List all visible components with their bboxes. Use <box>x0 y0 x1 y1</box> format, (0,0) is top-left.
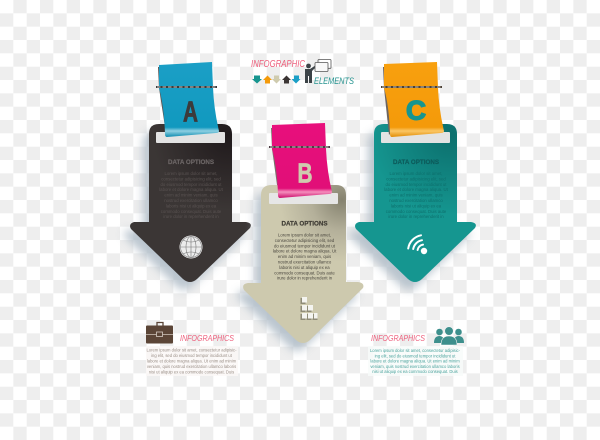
title: infographic: INFOGRAPHIC <box>251 58 305 70</box>
heading right: INFOGRAPHICS <box>371 333 425 343</box>
ribbon B <box>272 123 332 198</box>
bottom left block <box>146 322 238 376</box>
letter C: C <box>406 96 426 126</box>
body text left: nisi ut aliquip ex ea commodo consequat. Duis <box>149 370 234 374</box>
arrow B body <box>243 185 363 343</box>
ribbon C <box>384 62 444 137</box>
icon: globe <box>180 236 202 258</box>
body text B: commodo consequat. Duis aute <box>274 270 335 275</box>
body text C: enim ad minim veniam, quis <box>389 193 443 198</box>
top title block <box>251 58 355 87</box>
stitching B <box>269 146 330 148</box>
arrow C group <box>349 62 476 290</box>
arrow A slot <box>156 132 225 143</box>
body text B: nostrud exercitation ullamco <box>278 260 332 264</box>
arrow C slot <box>381 132 450 143</box>
body text B: consectetur adipisicing elit, sed <box>275 238 335 243</box>
arrow B shadow <box>237 193 357 351</box>
body text right: nisi ut aliquip ex ea commodo consequat. Duis <box>372 369 458 374</box>
body text left: ing elit, sed do eiusmod tempor incididunt ut <box>151 353 233 358</box>
body text right: labore et dolore magna aliqua. Ut enim ad minim <box>370 359 460 364</box>
ribbon C back <box>383 67 395 135</box>
body text B: do eiusmod tempor incididunt ut <box>274 243 336 248</box>
letter B: B <box>298 158 312 188</box>
body text A: do eiusmod tempor incididunt ut <box>161 182 222 187</box>
arrow A group <box>124 62 251 290</box>
body text right: Lorem ipsum dolor sit amet, consectetur adipisic- <box>370 348 461 353</box>
body text A <box>159 171 224 219</box>
body text B: Lorem ipsum dolor sit amet, <box>278 232 331 238</box>
body text C: commodo consequat. Duis aute <box>386 209 447 214</box>
arrow B group <box>237 123 363 351</box>
ribbon B back <box>271 128 283 189</box>
icon: people <box>434 327 464 345</box>
body text right: ing elit, sed do eiusmod tempor incididunt ut <box>375 353 456 358</box>
body text left <box>147 348 237 374</box>
body text B <box>273 232 337 281</box>
arrow A shadow <box>124 132 245 290</box>
icon row: small arrows <box>252 76 300 84</box>
body text C: laboris nisi ut aliquip ex ea <box>391 203 442 208</box>
ribbon A back <box>158 67 170 128</box>
arrow C shadow <box>349 132 470 290</box>
body text C: Lorem ipsum dolor sit amet, <box>389 171 443 176</box>
text panel left <box>146 346 238 376</box>
body text A: nostrud exercitation ullamco <box>164 198 218 203</box>
body text A: Lorem ipsum dolor sit amet, <box>164 171 218 176</box>
body text left: labore et dolore magna aliqua. Ut enim ad minim <box>147 358 237 364</box>
stitching A <box>156 86 217 88</box>
arrow C body <box>355 124 476 282</box>
body text A: labore et dolore magna aliqua. Ut <box>159 187 224 192</box>
body text right <box>370 348 461 374</box>
ribbon A <box>159 62 219 137</box>
heading left: INFOGRAPHICS <box>180 333 234 343</box>
body text A: enim ad minim veniam, quis <box>164 193 218 198</box>
text panel right <box>368 346 463 376</box>
body text C: do eiusmod tempor incididunt ut <box>386 182 447 187</box>
letter A: A <box>183 96 198 128</box>
body text C: nostrud exercitation ullamco <box>389 198 443 203</box>
heading A: DATA OPTIONS <box>168 159 215 166</box>
heading C: DATA OPTIONS <box>393 159 440 166</box>
arrow B slot <box>269 193 338 204</box>
body text B: labore et dolore magna aliqua. Ut <box>273 249 337 254</box>
icon: briefcase <box>146 322 173 344</box>
body text right: veniam, quis nostrud exercitation ullamco laboris <box>370 364 460 369</box>
body text A: commodo consequat. Duis aute <box>161 209 222 214</box>
stitching C <box>381 86 442 88</box>
body text A: consectetur adipisicing elit, sed <box>161 176 221 181</box>
heading B: DATA OPTIONS <box>282 220 328 228</box>
body text C: irure dolor in reprehenderit in <box>388 214 444 219</box>
body text A: irure dolor in reprehenderit in <box>163 214 219 219</box>
body text B: laboris nisi ut aliquip ex ea <box>279 265 330 270</box>
body text C: labore et dolore magna aliqua. Ut <box>384 187 449 192</box>
body text A: laboris nisi ut aliquip ex ea <box>166 203 217 208</box>
body text C <box>384 171 449 219</box>
icon: stacked bars <box>300 297 318 320</box>
body text left: Lorem ipsum dolor sit amet, consectetur adipisic- <box>147 348 237 352</box>
arrow A body <box>130 124 251 282</box>
body text B: irure dolor in reprehenderit in <box>277 276 333 281</box>
bottom right block <box>368 327 464 376</box>
body text B: enim ad minim veniam, quis <box>278 254 331 259</box>
icon: wifi signal <box>408 235 427 254</box>
title: elements: ELEMENTS <box>314 76 355 87</box>
body text C: consectetur adipisicing elit, sed <box>386 176 446 181</box>
body text left: veniam, quis nostrud exercitation ullamco laboris <box>147 364 236 369</box>
icon: presenter <box>305 60 331 83</box>
